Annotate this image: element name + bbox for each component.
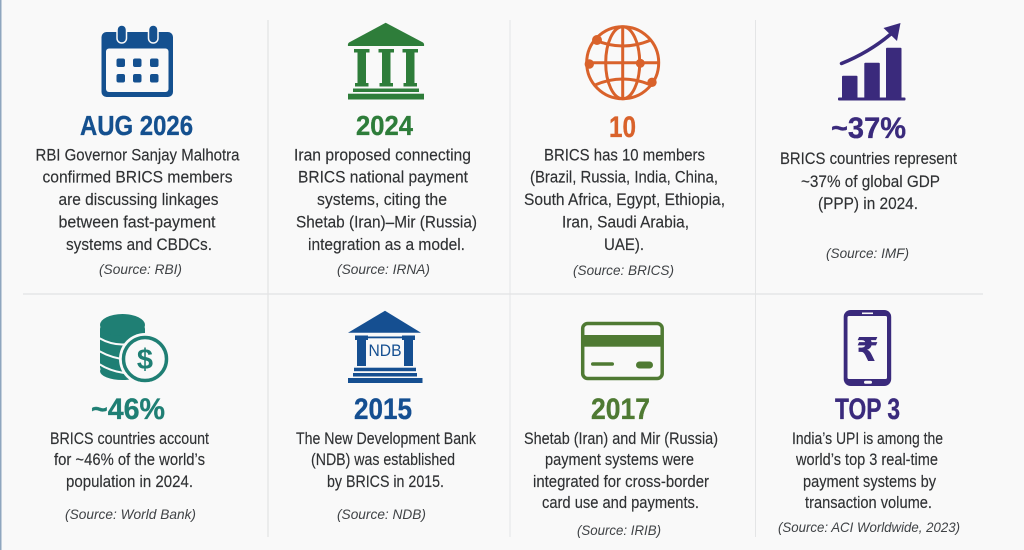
icon: smartphone with rupee: [844, 310, 891, 386]
text block: population share: for ~46% of the world’s: [54, 450, 205, 469]
text block: member list: Iran, Saudi Arabia,: [562, 212, 689, 232]
icon: NDB bank building: [348, 311, 422, 383]
text block: population share: BRICS countries account: [50, 429, 209, 448]
text block: member list: South Africa, Egypt, Ethiopia,: [524, 190, 725, 209]
heading: AUG 2026: AUG 2026: [80, 110, 193, 141]
heading: TOP 3: TOP 3: [835, 393, 900, 426]
panel: 46 percent population: [50, 314, 209, 522]
text block: Shetab and Mir: Shetab (Iran) and Mir (Russia): [524, 429, 718, 448]
source: World Bank: (Source: World Bank): [65, 506, 196, 522]
source: IRIB: (Source: IRIB): [577, 522, 661, 538]
text block: Shetab and Mir: [524, 429, 718, 512]
text block: Iran proposal: systems, citing the: [317, 190, 447, 209]
text block: Iran proposal: Iran proposed connecting: [294, 146, 471, 164]
text block: UPI ranking: world’s top 3 real-time: [795, 450, 938, 469]
text block: GDP share: ~37% of global GDP: [801, 172, 940, 191]
icon: rising bar chart with arrow: [838, 23, 906, 100]
text block: RBI statement: confirmed BRICS members: [42, 168, 232, 186]
icon: calendar: [102, 25, 173, 97]
text block: RBI statement: systems and CBDCs.: [66, 235, 212, 254]
text block: member list: (Brazil, Russia, India, China,: [530, 168, 718, 186]
text block: Iran proposal: integration as a model.: [308, 235, 465, 254]
panel: Aug 2026: [36, 25, 240, 277]
icon: green bank building: [348, 23, 424, 100]
icon: coin stack with dollar: [99, 314, 171, 385]
text block: GDP share: (PPP) in 2024.: [818, 194, 918, 213]
text block: member list: BRICS has 10 members: [544, 146, 705, 164]
source: RBI: (Source: RBI): [99, 261, 182, 277]
text block: Shetab and Mir: payment systems were: [545, 450, 694, 469]
text block: UPI ranking: India’s UPI is among the: [792, 429, 943, 448]
text block: Shetab and Mir: integrated for cross-border: [533, 472, 709, 491]
heading: 2017: 2017: [591, 393, 650, 426]
panel: Top 3 UPI: [778, 310, 960, 535]
text block: Iran proposal: Shetab (Iran)–Mir (Russia): [296, 212, 477, 232]
text block: UPI ranking: transaction volume.: [805, 493, 932, 512]
text block: member list: UAE).: [604, 235, 644, 254]
source: NDB: (Source: NDB): [337, 506, 426, 522]
text block: UPI ranking: payment systems by: [803, 472, 936, 491]
text block: RBI statement: between fast-payment: [58, 212, 216, 232]
text block: NDB founding: (NDB) was established: [311, 450, 455, 469]
heading: ~37%: ~37%: [831, 112, 906, 145]
source: ACI Worldwide: (Source: ACI Worldwide, 2023): [778, 519, 960, 535]
heading: ~46%: ~46%: [91, 393, 165, 426]
text block: population share: [50, 429, 209, 491]
text block: NDB founding: by BRICS in 2015.: [327, 472, 444, 491]
text block: GDP share: BRICS countries represent: [780, 149, 957, 168]
icon: smartphone with rupee: ₹: [856, 331, 879, 368]
text block: Shetab and Mir: card use and payments.: [542, 493, 699, 512]
heading: 10: 10: [609, 111, 636, 144]
text block: Iran proposal: [294, 146, 477, 254]
panel: 37 percent GDP: [780, 23, 957, 261]
panel: 2017 card integration: [524, 324, 718, 538]
icon: globe with nodes: [585, 27, 659, 99]
heading: 2024: 2024: [356, 110, 414, 141]
text block: GDP share: [780, 149, 957, 213]
text block: RBI statement: are discussing linkages: [58, 190, 218, 209]
panel: 10 members: [524, 27, 725, 278]
icon: payment card: [583, 324, 662, 378]
text block: RBI statement: RBI Governor Sanjay Malhotra: [36, 146, 240, 164]
text block: NDB founding: [296, 429, 476, 491]
panel: 2015 NDB: [296, 311, 476, 522]
heading: 2015: 2015: [354, 393, 412, 426]
text block: UPI ranking: [792, 429, 943, 512]
source: BRICS: (Source: BRICS): [573, 262, 674, 278]
text block: member list: [524, 146, 725, 254]
icon: coin stack with dollar: $: [137, 344, 153, 376]
text block: RBI statement: [36, 146, 240, 254]
text block: Iran proposal: BRICS national payment: [298, 168, 468, 186]
source: IMF: (Source: IMF): [826, 245, 909, 261]
panel: 2024: [294, 23, 477, 277]
text block: NDB founding: The New Development Bank: [296, 429, 476, 448]
text block: population share: population in 2024.: [66, 472, 193, 491]
source: IRNA: (Source: IRNA): [337, 261, 430, 277]
icon: NDB bank building: NDB: [368, 341, 402, 360]
